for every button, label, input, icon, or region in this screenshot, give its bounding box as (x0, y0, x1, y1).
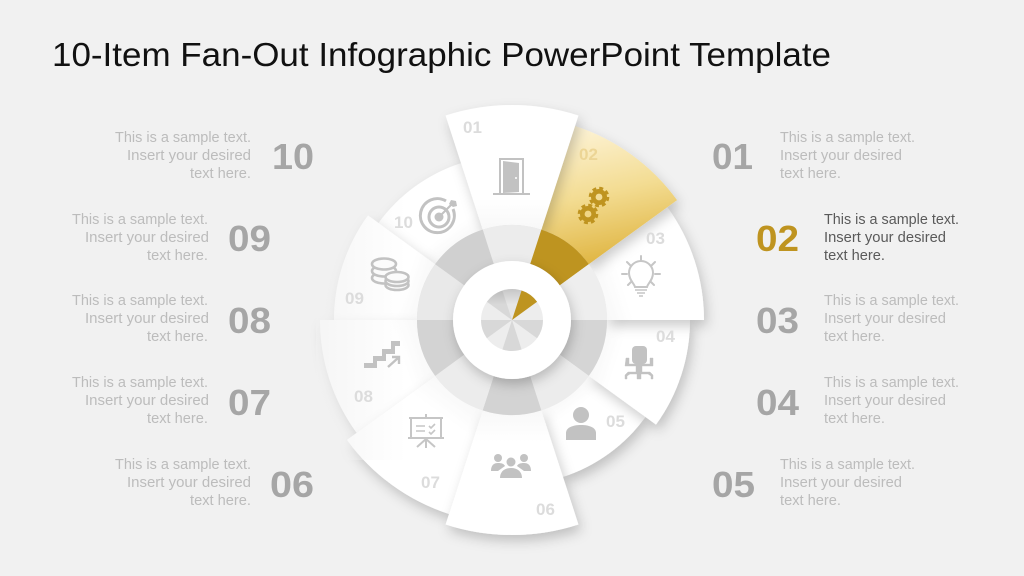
item 04 label: This is a sample text. (824, 375, 959, 391)
item 05 label: text here. (780, 493, 841, 509)
icon: office chair (625, 346, 653, 379)
item 04 label: 04 (756, 382, 799, 423)
item 10 label: Insert your desired (127, 148, 251, 164)
item 02 label highlighted (756, 212, 959, 264)
wedge numbers: 02 (579, 145, 598, 164)
item 08 label: text here. (147, 329, 208, 345)
item 02 label highlighted: 02 (756, 218, 799, 259)
icon: stairs with arrow (364, 341, 400, 368)
item 02 label highlighted: text here. (824, 248, 885, 264)
title: 10-Item Fan-Out Infographic PowerPoint Template (52, 37, 831, 74)
wedge 02 highlighted (541, 126, 677, 264)
wedge 09 (326, 213, 443, 344)
item 06 label (115, 457, 314, 509)
wedge 04 (581, 296, 698, 427)
wedge numbers: 05 (606, 412, 625, 431)
item 10 label (115, 130, 314, 182)
wedge numbers (345, 118, 675, 519)
item 01 label: 01 (712, 136, 753, 177)
wedge numbers: 04 (656, 327, 675, 346)
icon: target (420, 199, 457, 233)
item 02 label highlighted: Insert your desired (824, 230, 946, 246)
item 10 label: This is a sample text. (115, 130, 251, 146)
middle ring (413, 225, 611, 415)
item 06 label: Insert your desired (127, 475, 251, 491)
fan diagram (311, 105, 713, 535)
item 09 label: This is a sample text. (72, 212, 208, 228)
icon: person (566, 407, 596, 440)
item 09 label: text here. (147, 248, 208, 264)
item 08 label: 08 (228, 300, 271, 341)
wedge numbers: 08 (354, 387, 373, 406)
item 07 label: 07 (228, 382, 271, 423)
item 05 label: Insert your desired (780, 475, 902, 491)
item 04 label: text here. (824, 411, 885, 427)
item 08 label (72, 293, 271, 345)
item 07 label: text here. (147, 411, 208, 427)
item 01 label (712, 130, 915, 182)
item 07 label: This is a sample text. (72, 375, 208, 391)
icon: presentation board (408, 414, 444, 448)
item 02 label highlighted: This is a sample text. (824, 212, 959, 228)
item 09 label: 09 (228, 218, 271, 259)
wedge numbers: 03 (646, 229, 665, 248)
wedge numbers: 06 (536, 500, 555, 519)
item 03 label: Insert your desired (824, 311, 946, 327)
item 03 label: This is a sample text. (824, 293, 959, 309)
inner pie (480, 289, 544, 351)
wedge 03 (580, 204, 713, 349)
item 03 label (756, 293, 959, 345)
wedge numbers: 09 (345, 289, 364, 308)
item 05 label: 05 (712, 464, 755, 505)
item 10 label: text here. (190, 166, 251, 182)
item 08 label: This is a sample text. (72, 293, 208, 309)
item 07 label (72, 375, 271, 427)
item 01 label: This is a sample text. (780, 130, 915, 146)
item 04 label: Insert your desired (824, 393, 946, 409)
item 06 label: 06 (270, 464, 314, 505)
wedge 05 (524, 363, 650, 483)
item 01 label: Insert your desired (780, 148, 902, 164)
wedge numbers: 07 (421, 473, 440, 492)
wedge numbers: 01 (463, 118, 482, 137)
item 09 label (72, 212, 271, 264)
white hub ring (453, 261, 571, 379)
item 06 label: text here. (190, 493, 251, 509)
icon: coins (372, 258, 408, 290)
item 04 label (756, 375, 959, 427)
wedge 06 (446, 410, 578, 535)
icon: gears (579, 188, 608, 223)
wedge 08 (311, 291, 444, 436)
item 03 label: 03 (756, 300, 799, 341)
wedge 10 (374, 157, 500, 277)
wedge 01 (446, 105, 578, 230)
icon: light bulb (622, 256, 660, 296)
item 05 label: This is a sample text. (780, 457, 915, 473)
item 09 label: Insert your desired (85, 230, 209, 246)
icon: door (493, 158, 530, 195)
item 06 label: This is a sample text. (115, 457, 251, 473)
item 05 label (712, 457, 915, 509)
item 07 label: Insert your desired (85, 393, 209, 409)
item 03 label: text here. (824, 329, 885, 345)
icon: group of people (491, 454, 531, 478)
wedge numbers: 10 (394, 213, 413, 232)
item 10 label: 10 (272, 136, 314, 177)
wedge 07 (341, 356, 510, 522)
item 01 label: text here. (780, 166, 841, 182)
item 08 label: Insert your desired (85, 311, 209, 327)
